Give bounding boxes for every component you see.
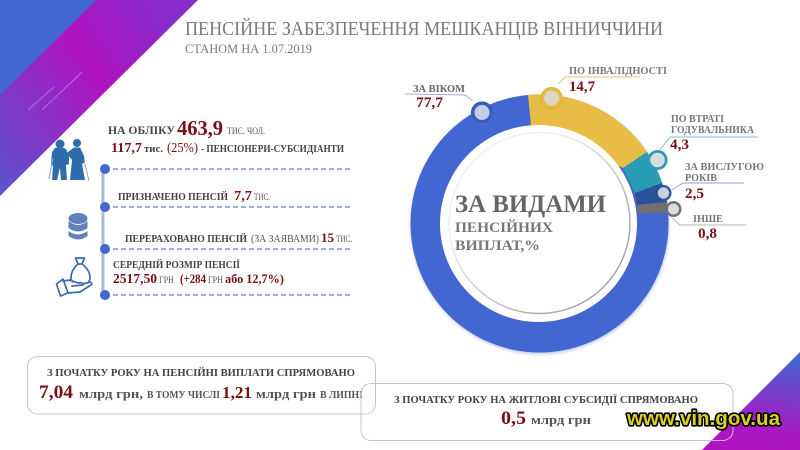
callout: disability: ПО ІНВАЛІДНОСТІ (569, 66, 667, 77)
decorative corner: bottom right (702, 352, 800, 450)
callout: long service: РОКІВ (685, 173, 717, 184)
text block: registered pensioners: ТИС. ЧОЛ. (227, 126, 265, 136)
segment: other 0,8 (637, 202, 668, 214)
website label: www.vin.gov.ua (626, 408, 781, 430)
text block: average pension: ГРН (208, 275, 223, 285)
panel: pension payments since start of year: В ТОМУ ЧИСЛІ (147, 389, 220, 401)
title: ПЕНСІЙНЕ ЗАБЕЗПЕЧЕННЯ МЕШКАНЦІВ ВІННИЧЧИНИ (185, 17, 663, 40)
text block: registered pensioners: - ПЕНСІОНЕРИ-СУБСИДІАНТИ (201, 144, 344, 155)
panel: pension payments since start of year: млрд грн (256, 386, 317, 401)
callout: other: 0,8 (698, 226, 717, 242)
segment: age 77,7 (410, 94, 668, 352)
text block: registered pensioners: тис. (144, 143, 163, 155)
callout: loss of breadwinner: 4,3 (670, 137, 689, 153)
text block: pensions assigned: ПРИЗНАЧЕНО ПЕНСІЙ (118, 191, 228, 203)
segment: loss of breadwinner 4,3 (623, 152, 662, 193)
text block: average pension: СЕРЕДНІЙ РОЗМІР ПЕНСІЇ (113, 258, 240, 271)
donut chart: pension types (410, 94, 669, 354)
panel: housing subsidies since start of year: млрд грн (531, 412, 592, 427)
panel: housing subsidies since start of year (361, 384, 733, 440)
text block: average pension: 2517,50 (113, 272, 157, 287)
text block: registered pensioners: 117,7 (111, 141, 142, 156)
text block: pensions recalculated: 15 (321, 230, 334, 245)
panel: pension payments since start of year: В ЛИПНІ (320, 389, 363, 401)
callout: age (405, 84, 493, 124)
text block: pensions assigned (118, 189, 270, 204)
panel: pension payments since start of year: З ПОЧАТКУ РОКУ НА ПЕНСІЙНІ ВИПЛАТИ СПРЯМОВАНО (47, 367, 355, 379)
inner rim circle (449, 132, 630, 314)
panel: pension payments since start of year: млрд грн, (79, 386, 143, 401)
text block: pensions recalculated (125, 230, 352, 245)
text block: average pension: (+284 (180, 271, 206, 286)
text block: pensions recalculated: ТИС. (336, 234, 352, 244)
icon: database stack (68, 213, 88, 240)
text block: registered pensioners: НА ОБЛІКУ (108, 123, 175, 137)
callout: other: ІНШЕ (693, 214, 723, 225)
callout: long service (656, 162, 764, 202)
callout: loss of breadwinner (648, 114, 758, 170)
text block: pensions assigned: 7,7 (234, 189, 252, 204)
subtitle: date: СТАНОМ НА 1.07.2019 (185, 41, 312, 56)
callout: age: ЗА ВІКОМ (413, 84, 465, 95)
callout: age: 77,7 (416, 95, 444, 111)
callout: loss of breadwinner: ГОДУВАЛЬНИКА (671, 125, 754, 136)
text block: pensions recalculated: (ЗА ЗАЯВАМИ) (251, 234, 319, 245)
segment: long service 2,5 (635, 183, 667, 205)
panel: housing subsidies since start of year: 0,5 (501, 408, 526, 429)
decorative corner: top left (0, 0, 198, 196)
callout: disability: 14,7 (569, 79, 595, 95)
callout: long service: ЗА ВИСЛУГОЮ (685, 162, 764, 173)
icon: money bag on hand (56, 258, 92, 296)
donut centre label: ЗА ВИДАМИ (455, 191, 607, 218)
icon: elderly couple (49, 139, 89, 181)
panel: pension payments since start of year (28, 356, 376, 414)
text block: average pension: ГРН (159, 275, 174, 285)
donut centre label (455, 191, 607, 254)
text block: average pension (113, 258, 284, 287)
timeline rail with dashed dividers (100, 164, 353, 300)
text block: registered pensioners: (25%) (167, 141, 198, 156)
panel: pension payments since start of year: 7,04 (39, 382, 74, 403)
donut centre label: ПЕНСІЙНИХ (455, 219, 553, 236)
text block: pensions assigned: ТИС. (254, 192, 270, 202)
text block: pensions recalculated: ПЕРЕРАХОВАНО ПЕНСІЙ (125, 233, 247, 245)
callout: other (666, 201, 746, 242)
text block: average pension: або 12,7%) (225, 271, 284, 286)
text block: registered pensioners (108, 116, 344, 156)
callout: long service: 2,5 (685, 186, 704, 202)
panel: pension payments since start of year: 1,21 (222, 383, 252, 402)
donut centre label: ВИПЛАТ,% (455, 238, 540, 254)
callout: disability (541, 66, 667, 108)
panel: housing subsidies since start of year: З ПОЧАТКУ РОКУ НА ЖИТЛОВІ СУБСИДІЇ СПРЯМОВАНО (394, 393, 698, 406)
callout: loss of breadwinner: ПО ВТРАТІ (671, 114, 724, 125)
text block: registered pensioners: 463,9 (177, 116, 223, 140)
segment: disability 14,7 (528, 94, 647, 168)
donut hole (440, 125, 637, 322)
